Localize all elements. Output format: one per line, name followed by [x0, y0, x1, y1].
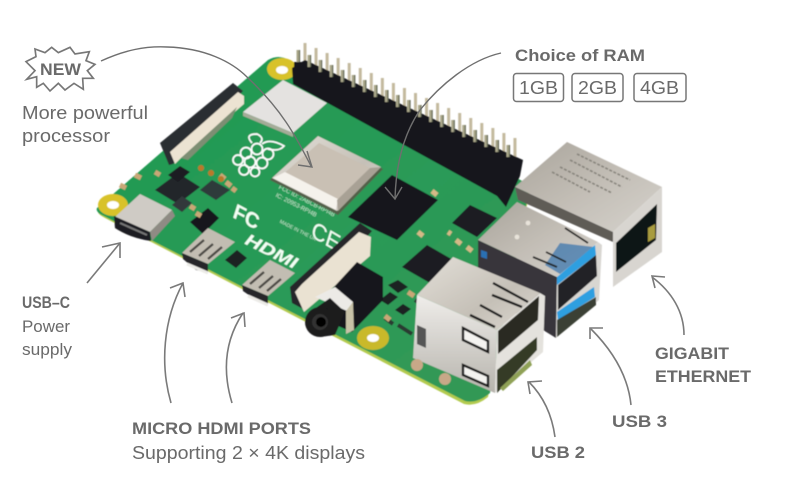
micro HDMI port 2 — [242, 260, 295, 305]
RAM option: 2GB — [572, 74, 623, 102]
text: processor: processor — [22, 126, 110, 146]
USB 3 ports — [478, 202, 602, 338]
wifi shield — [243, 80, 327, 133]
text: gigabit ethernet — [655, 344, 752, 386]
board markings: MADE IN THE UK — [278, 219, 318, 243]
display connector — [160, 83, 244, 165]
board markings: © Raspberry Pi 2018 — [370, 114, 432, 151]
RAM option: 4GB: 4GB — [640, 78, 679, 98]
arrow: USB 3 — [590, 328, 631, 405]
board markings: CE — [308, 216, 344, 257]
text: micro HDMI — [132, 419, 365, 463]
icon: mounting holes — [98, 58, 389, 350]
board markings: HDMI — [241, 231, 303, 272]
arrow: RAM — [385, 53, 501, 199]
text: USB-C power: Power — [22, 317, 70, 336]
board markings: IC: 20953-RPI4B — [274, 193, 317, 219]
text: micro HDMI: Supporting 2 × 4K displays — [132, 443, 365, 463]
text: USB-C power: supply — [22, 340, 73, 359]
board edge — [98, 60, 530, 405]
RAM chip — [348, 175, 438, 240]
text: USB-C power — [22, 293, 73, 359]
board markings: Raspberry Pi 4 Model B — [363, 103, 432, 143]
USB 2 ports — [411, 257, 545, 393]
text: gigabit ethernet: ETHERNET — [655, 367, 752, 386]
CPU — [270, 136, 383, 215]
text: processor — [22, 103, 148, 146]
RAM option: 4GB — [634, 74, 686, 102]
raspberry logo — [233, 134, 284, 176]
GPIO pin header — [292, 43, 523, 207]
heading: Choice of RAM: Choice of RAM — [515, 46, 645, 65]
arrow: USB-C — [87, 243, 120, 283]
badge: NEW — [26, 47, 95, 91]
board surface — [97, 57, 530, 402]
text: processor: More powerful — [22, 103, 148, 123]
arrow: processor — [101, 47, 312, 167]
ICs and small components — [120, 165, 497, 334]
text: USB-C power: USB–C — [22, 293, 70, 312]
arrow: micro HDMI 1 — [165, 283, 185, 403]
board markings: FCC ID: 2ABCB-RPI4B — [277, 185, 336, 218]
ethernet port — [515, 142, 662, 287]
RAM option: 1GB: 1GB — [519, 78, 558, 98]
USB-C connector — [114, 194, 175, 241]
badge: NEW: NEW — [40, 60, 82, 79]
board markings — [230, 103, 432, 272]
RAM option: 2GB: 2GB — [578, 78, 617, 98]
photo: Raspberry Pi 4 board — [97, 43, 662, 405]
text: micro HDMI: MICRO HDMI PORTS — [132, 419, 311, 438]
micro HDMI port 1 — [182, 228, 235, 273]
arrow: ethernet — [652, 276, 684, 335]
audio jack — [305, 262, 383, 337]
text: gigabit ethernet: GIGABIT — [655, 344, 730, 363]
arrow: micro HDMI 2 — [226, 313, 245, 403]
text: USB 2: USB 2 — [531, 443, 585, 462]
board markings: FC — [230, 200, 262, 235]
camera connector — [290, 223, 372, 312]
text: USB 3: USB 3 — [612, 412, 667, 431]
arrow: USB 2 — [528, 381, 555, 437]
RAM option: 1GB — [514, 74, 564, 102]
